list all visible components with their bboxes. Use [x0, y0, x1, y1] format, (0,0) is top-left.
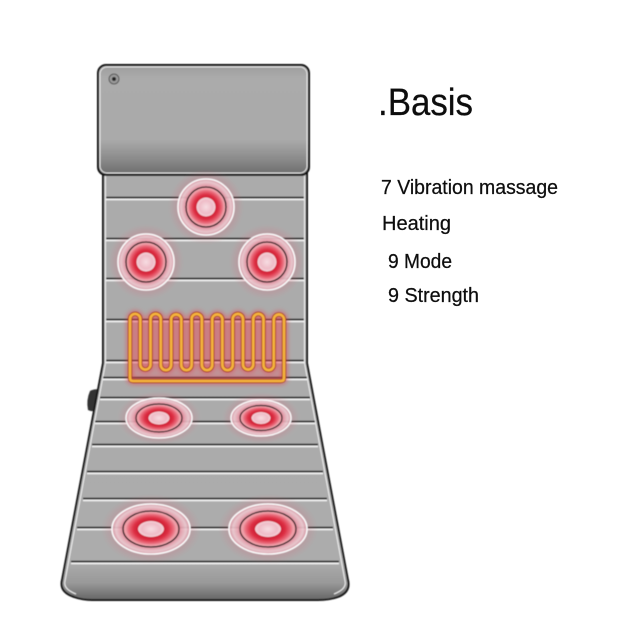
side controller connector — [87, 389, 101, 411]
mat seams — [71, 198, 339, 564]
mat body — [62, 172, 349, 600]
coil dark outline — [130, 314, 284, 381]
heading: .Basis — [378, 82, 473, 124]
pillow button — [109, 74, 119, 84]
feature list — [381, 177, 558, 307]
feature: heating: Heating — [382, 213, 451, 235]
massage node: lower back left — [117, 391, 201, 445]
feature: vibration massage: 7 Vibration massage — [381, 177, 558, 199]
feature: mode: 9 Mode — [388, 251, 452, 273]
feature: strength: 9 Strength — [388, 285, 479, 307]
massage mat — [62, 65, 349, 600]
heating coil — [130, 314, 284, 381]
pillow inner highlight — [100, 67, 307, 173]
coil orange core — [130, 314, 284, 381]
massage node: upper back right — [229, 224, 305, 300]
mat inner edge highlight — [65, 176, 345, 594]
pillow — [98, 65, 309, 175]
massage node: lower back right — [222, 392, 300, 444]
massage node: upper back left — [108, 224, 184, 300]
massage node: thigh right — [218, 494, 318, 564]
massage node: upper back centre — [168, 169, 244, 245]
coil pink heat area — [130, 316, 284, 381]
coil red glow — [130, 314, 284, 381]
massage node: thigh left — [101, 494, 201, 564]
